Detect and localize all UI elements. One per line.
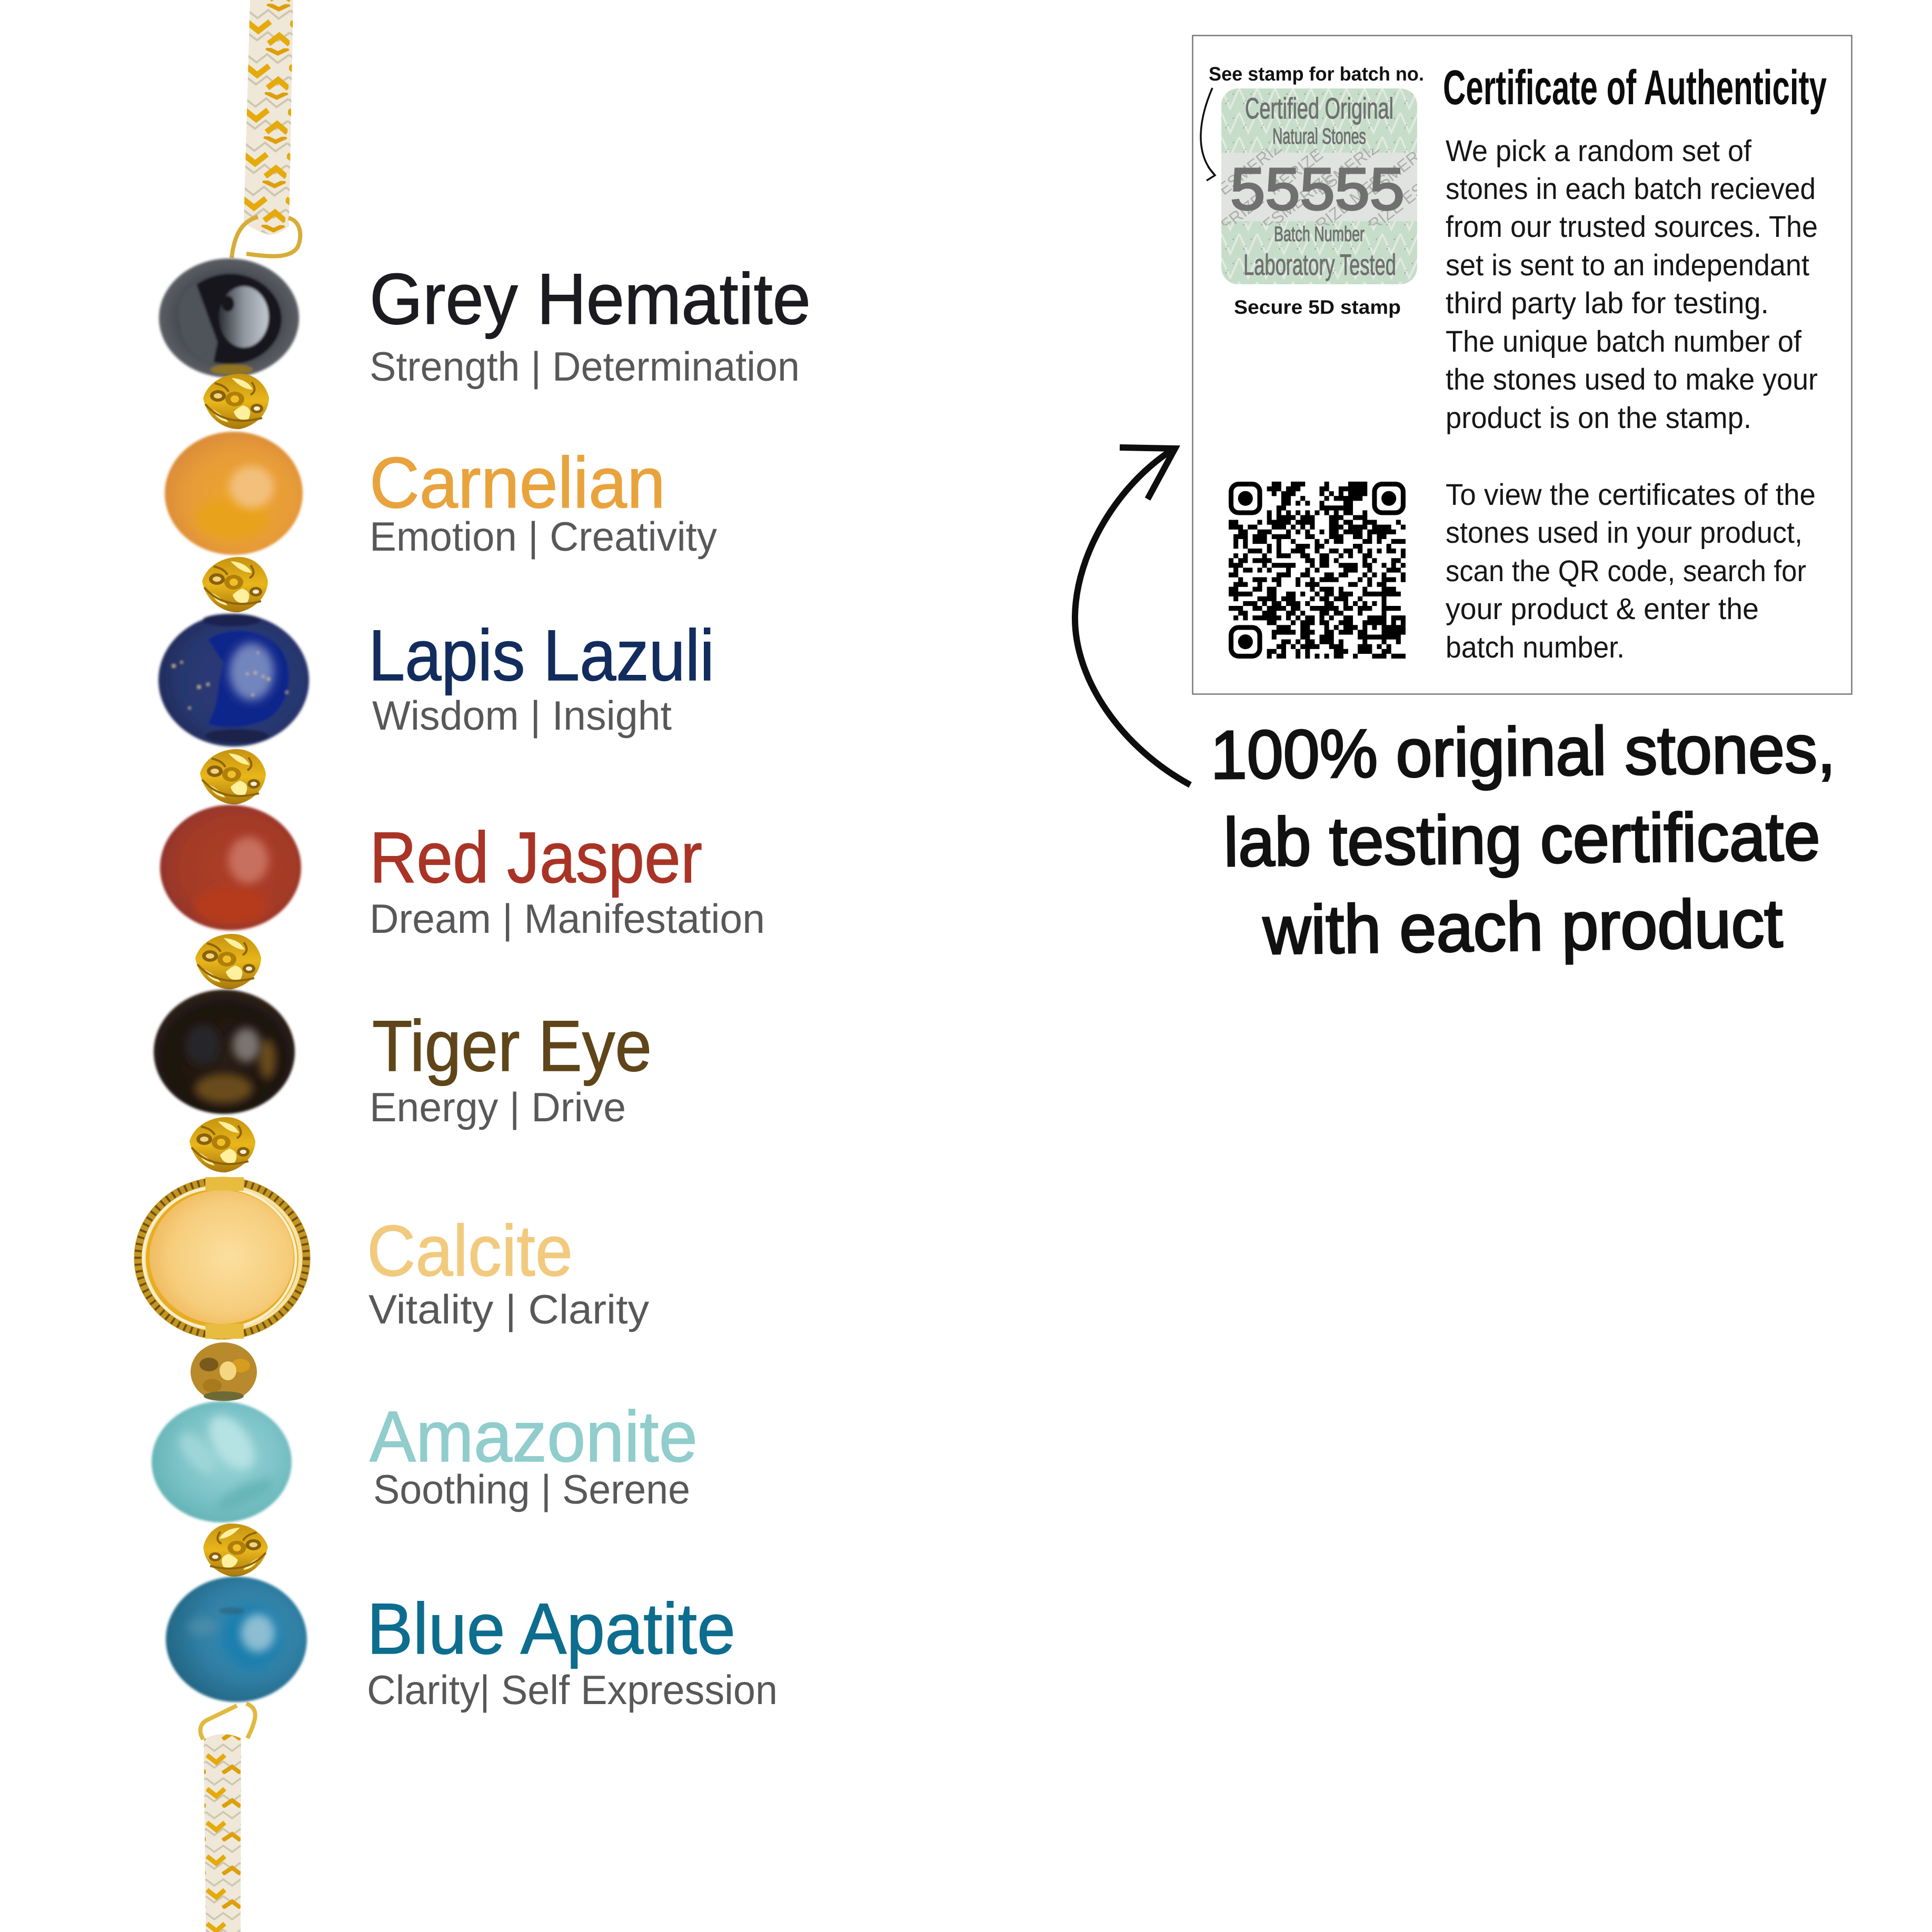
label: Blue Apatite: Blue Apatite — [367, 1589, 735, 1669]
label: Blue Apatite: Clarity| Self Expression — [367, 1667, 778, 1713]
top braided cord — [244, 0, 293, 235]
bead: lapis lazuli — [158, 614, 309, 746]
text: certificate explanation: third party lab for testing. — [1446, 286, 1769, 320]
secure stamp: ESMERIZE — [1312, 131, 1391, 199]
text: certificate explanation: The unique batch number of — [1446, 325, 1801, 358]
secure stamp: MERIZE — [1264, 145, 1327, 199]
text: certificate explanation: We pick a random set of — [1446, 134, 1751, 168]
bead: amazonite — [152, 1401, 292, 1522]
bead: calcite in gold frame — [138, 1177, 306, 1339]
bead: blue apatite — [166, 1577, 307, 1702]
top wire hook — [232, 217, 300, 258]
label: Lapis Lazuli: Lapis Lazuli — [369, 615, 714, 696]
spacer bead 3 — [200, 749, 266, 804]
label: Tiger Eye: Tiger Eye — [372, 1006, 652, 1087]
secure stamp: Certified Original — [1245, 92, 1393, 125]
label: Tiger Eye: Energy | Drive — [370, 1084, 626, 1130]
label: Lapis Lazuli: Wisdom | Insight — [372, 692, 672, 739]
secure stamp — [1221, 88, 1417, 284]
secure stamp: ESMER — [1365, 147, 1423, 199]
label: Tiger Eye — [370, 1006, 652, 1130]
secure stamp: 55555 — [1230, 156, 1405, 222]
label: Red Jasper — [370, 818, 765, 942]
text: certificate explanation: set is sent to an independant — [1446, 248, 1809, 282]
label: Calcite — [367, 1211, 649, 1332]
tagline: 100% original stones: lab testing certificate — [1223, 798, 1820, 881]
tagline: 100% original stones — [1210, 710, 1836, 969]
icon: small curved arrow — [1201, 88, 1215, 181]
label: Amazonite: Soothing | Serene — [373, 1466, 690, 1512]
tagline: 100% original stones: with each product — [1262, 884, 1783, 969]
spacer bead 4 — [195, 934, 261, 989]
label: Calcite: Vitality | Clarity — [369, 1286, 649, 1332]
secure stamp: Natural Stones — [1272, 124, 1366, 148]
spacer bead 6 — [191, 1342, 257, 1401]
bead: grey hematite — [159, 258, 299, 377]
text: certificate explanation: the stones used to make your — [1446, 363, 1818, 396]
label: Red Jasper: Dream | Manifestation — [370, 895, 765, 942]
label: Amazonite: Amazonite — [370, 1397, 698, 1477]
bottom braided cord — [204, 1734, 241, 1932]
label: Amazonite — [370, 1397, 698, 1512]
label: Carnelian: Carnelian — [370, 443, 665, 523]
label: Grey Hematite — [370, 259, 811, 390]
bead: tiger eye — [154, 990, 295, 1114]
spacer bead 7 — [203, 1523, 268, 1577]
bracelet: beads on braided cord — [138, 0, 309, 1932]
secure stamp: ESMERIZE — [1214, 131, 1294, 199]
label: Blue Apatite — [367, 1589, 778, 1713]
secure stamp: RIZE MER — [1312, 170, 1387, 235]
text: certificate explanation: from our trusted sources. The — [1446, 210, 1818, 244]
secure stamp: FRIZE — [1217, 190, 1267, 235]
label: Carnelian: Emotion | Creativity — [370, 513, 717, 560]
text: QR instructions — [1446, 478, 1816, 664]
bottom wire hook — [201, 1704, 255, 1739]
label: Calcite: Calcite — [367, 1211, 573, 1291]
label: Grey Hematite: Strength | Determination — [370, 343, 800, 390]
text: certificate explanation: product is on the stamp. — [1446, 401, 1751, 435]
text: QR instructions: To view the certificates of the — [1446, 478, 1816, 512]
secure stamp: Batch Number — [1274, 223, 1365, 246]
QR code — [1229, 484, 1406, 656]
label: Lapis Lazuli — [369, 615, 714, 739]
gold frame — [138, 1181, 306, 1336]
text: secure 5D stamp: Secure 5D stamp — [1234, 296, 1401, 318]
label: Red Jasper: Red Jasper — [370, 818, 702, 898]
tagline: 100% original stones: 100% original stones, — [1210, 710, 1836, 793]
calcite stone — [150, 1190, 294, 1324]
text: QR instructions: scan the QR code, search for — [1446, 554, 1806, 588]
spacer bead 5 — [190, 1117, 255, 1172]
secure stamp: Laboratory Tested — [1243, 248, 1396, 281]
panel: certificate of authenticity — [1193, 36, 1852, 694]
secure stamp: RIZE ESM — [1365, 171, 1439, 235]
text: certificate explanation — [1446, 134, 1818, 435]
text: certificate explanation: stones in each batch recieved — [1446, 172, 1816, 206]
bead: red jasper — [160, 805, 301, 930]
bead: carnelian — [165, 432, 303, 555]
text: QR instructions: stones used in your product, — [1446, 516, 1802, 550]
spacer bead 2 — [202, 557, 268, 612]
arrow: from tagline to certificate — [1075, 447, 1190, 785]
text: see stamp for batch no: See stamp for batch no. — [1209, 63, 1424, 85]
text: QR instructions: batch number. — [1446, 631, 1625, 664]
spacer bead 1 — [203, 374, 269, 429]
secure stamp: FSMERIZE — [1259, 167, 1338, 235]
label: Grey Hematite: Grey Hematite — [370, 259, 811, 340]
label: Carnelian — [370, 443, 717, 560]
text: QR instructions: your product & enter the — [1446, 592, 1759, 626]
